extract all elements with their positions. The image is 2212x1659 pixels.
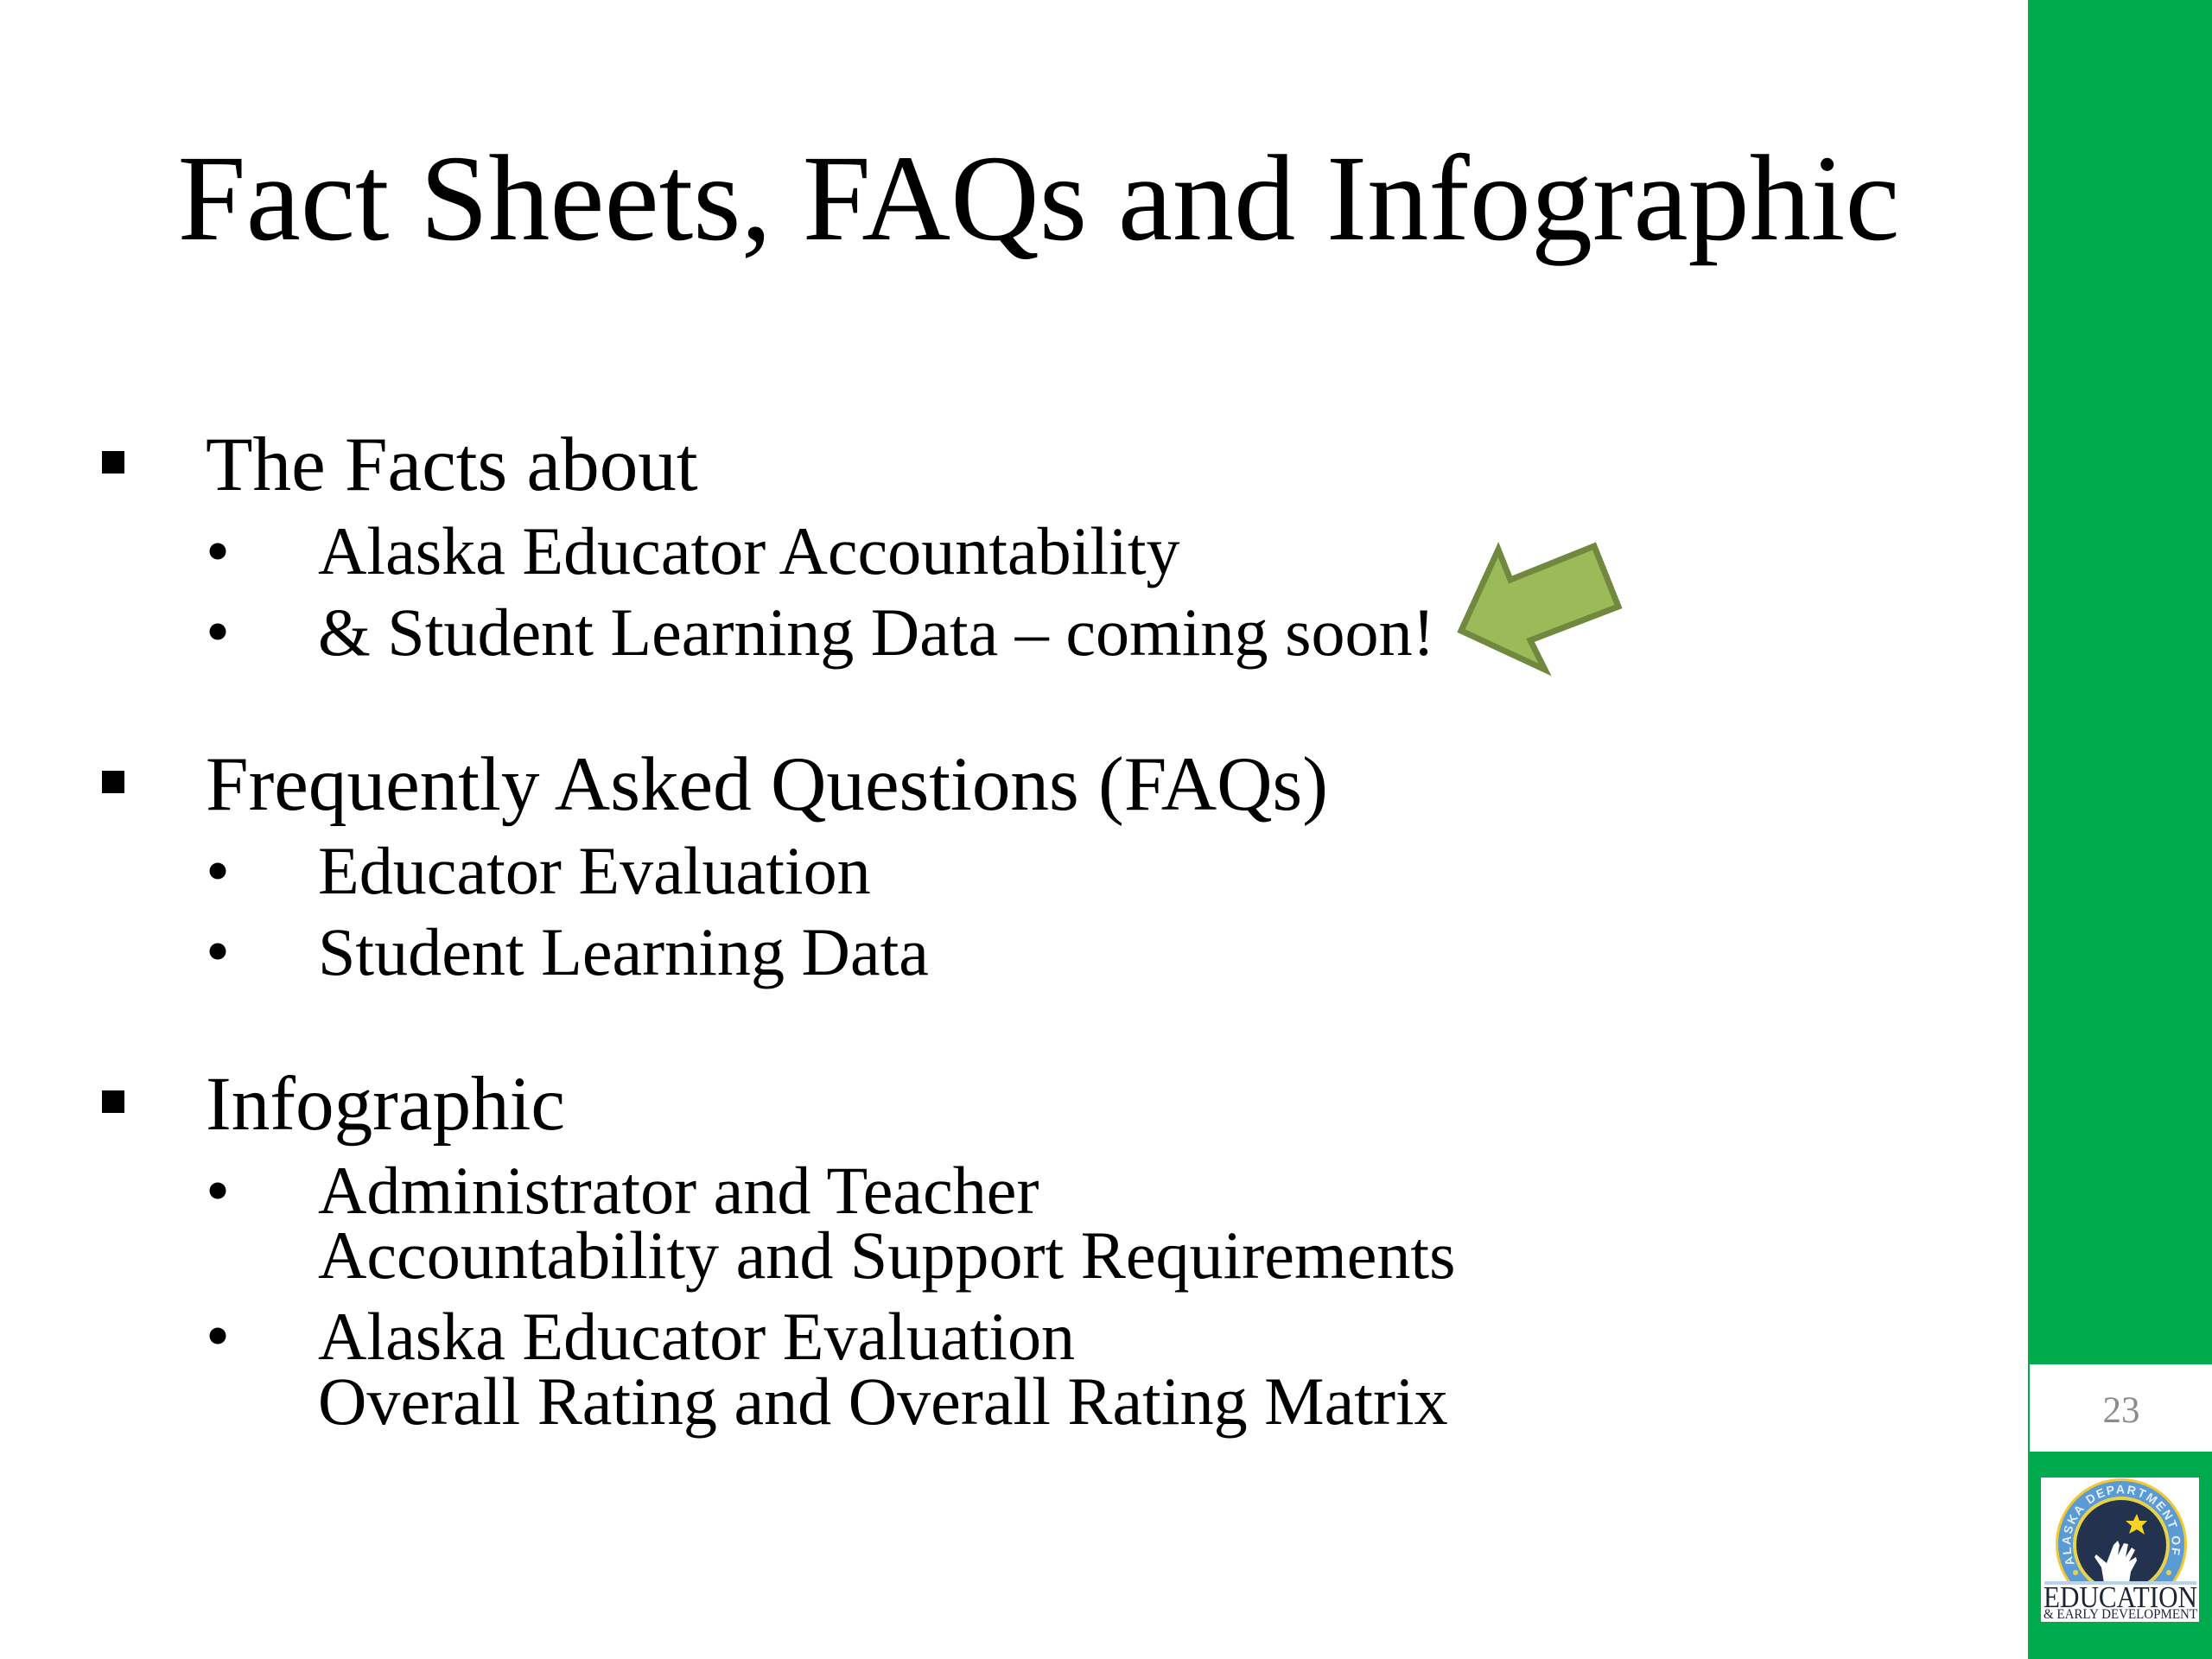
bullet item: Educator Evaluation: Educator Evaluation xyxy=(318,833,871,908)
section: The Facts about xyxy=(102,423,1435,670)
bullet item: Alaska Educator Evaluation rating matrix: Alaska Educator Evaluation xyxy=(318,1299,1075,1374)
bullet item: Student Learning Data coming soon: & Student Learning Data – coming soon! xyxy=(318,594,1435,670)
seal ring text: ALASKA DEPARTMENT OF xyxy=(2062,1484,2181,1564)
sub-wordmark: & EARLY DEVELOPMENT xyxy=(2044,1607,2197,1622)
heading: Frequently Asked Questions: Frequently Asked Questions (FAQs) xyxy=(206,742,1328,827)
section: Infographic xyxy=(102,1062,1455,1439)
title: Fact Sheets, FAQs and Infographic xyxy=(178,130,1900,266)
bullet item: Administrator and Teacher requirements: Administrator and Teacher xyxy=(318,1153,1039,1228)
square bullet xyxy=(102,451,124,474)
square bullet xyxy=(102,1090,124,1113)
heading: Infographic: Infographic xyxy=(206,1062,565,1147)
section: Frequently Asked Questions xyxy=(102,742,1328,989)
square bullet xyxy=(102,771,124,793)
bullet item: Alaska Educator Accountability: Alaska Educator Accountability xyxy=(318,513,1180,588)
bullet item: Administrator and Teacher requirements xyxy=(209,1153,1455,1293)
arrow pointing at coming soon xyxy=(1461,546,1618,670)
blue rule above wordmark xyxy=(2044,1581,2196,1585)
bullet item: Alaska Educator Evaluation rating matrix xyxy=(209,1299,1448,1439)
star xyxy=(2126,1514,2147,1535)
green sidebar xyxy=(2028,0,2212,1659)
bullet item: Student Learning Data: Student Learning Data xyxy=(318,914,929,989)
bullet item: Administrator and Teacher requirements: Accountability and Support Requirements xyxy=(318,1217,1455,1293)
logo: Alaska Department of Education & Early Development xyxy=(2041,1478,2199,1622)
wordmark: EDUCATION xyxy=(2044,1580,2197,1614)
bullet item: Alaska Educator Evaluation rating matrix: Overall Rating and Overall Rating Matrix xyxy=(318,1363,1448,1439)
page number box: 23 xyxy=(2103,1390,2139,1431)
heading: The Facts about: The Facts about xyxy=(206,423,698,507)
hand xyxy=(2094,1541,2137,1583)
page number box xyxy=(2030,1364,2212,1452)
seal xyxy=(2056,1478,2187,1581)
seal dots xyxy=(2073,1570,2171,1575)
